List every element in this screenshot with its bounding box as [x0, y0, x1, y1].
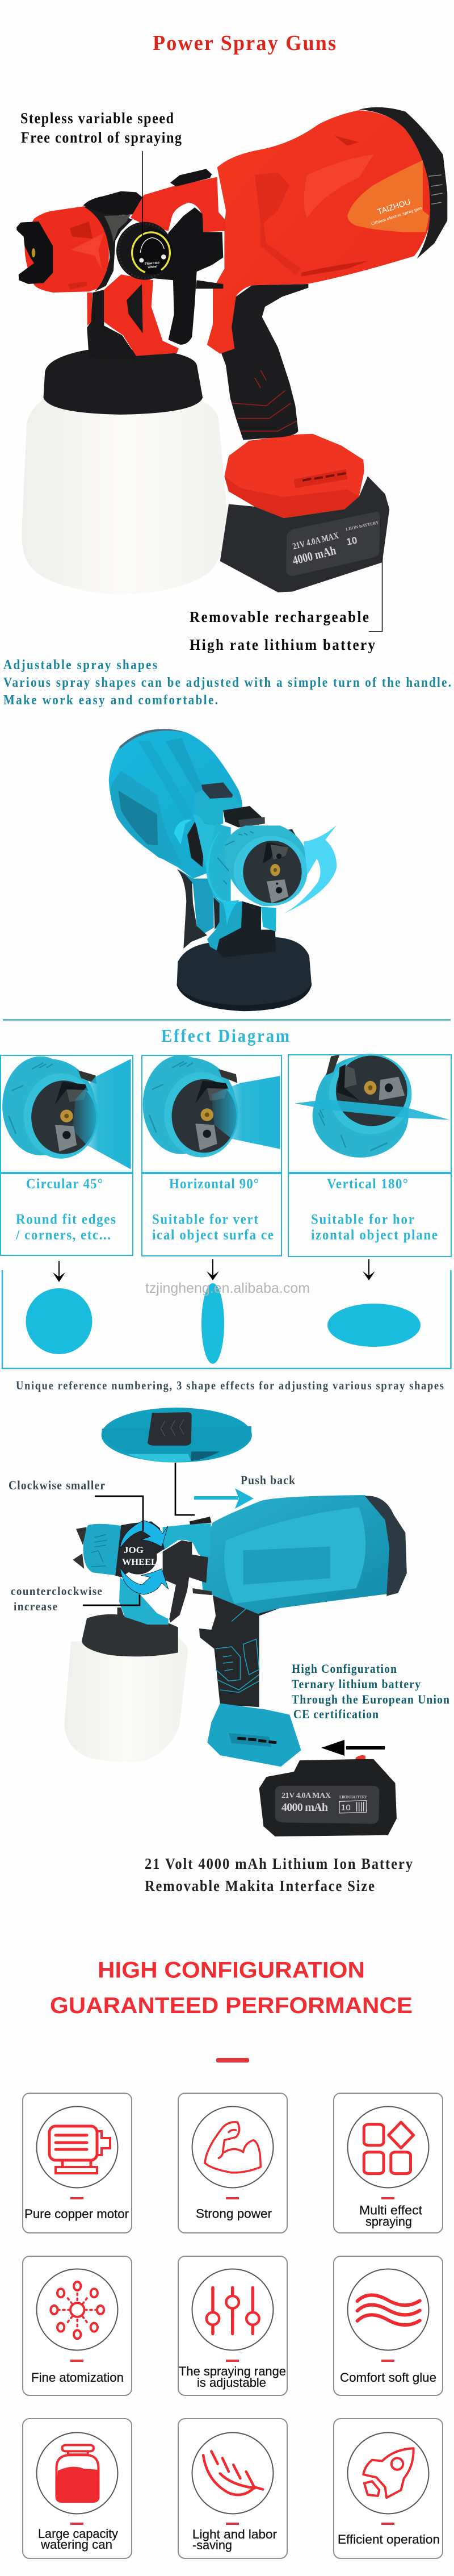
text block: adjustable spray shapes — [3, 657, 451, 707]
top tab — [83, 191, 146, 215]
callout: battery: Removable rechargeable — [190, 608, 369, 625]
switch — [201, 782, 233, 799]
nozzle tips — [76, 1527, 87, 1545]
callout: push back: Push back — [241, 1473, 295, 1487]
description: Suitable for hor — [311, 1212, 414, 1228]
text block: high configuration battery: Through the European Union — [292, 1693, 449, 1706]
arrow: horizontal pattern — [363, 1259, 375, 1280]
cup stem — [87, 290, 138, 360]
card: multi effect spraying: Multi effect — [359, 2203, 423, 2218]
battery pack — [220, 476, 389, 592]
callout: variable speed: Stepless variable speed — [20, 110, 174, 127]
heading: high configuration guaranteed performance: GUARANTEED PERFORMANCE — [50, 1993, 413, 2018]
card: light and labor saving: Light and labor — [192, 2527, 277, 2541]
battery label text — [291, 520, 380, 567]
callout: clockwise smaller: Clockwise smaller — [9, 1479, 105, 1492]
jog wheel caption: JOG — [124, 1546, 144, 1555]
black nozzle tip — [16, 222, 53, 284]
spray shape: circle — [26, 1288, 92, 1354]
description — [15, 1212, 116, 1243]
description: / corners, etc... — [15, 1227, 111, 1243]
battery label panel — [286, 512, 380, 576]
dial edge — [280, 829, 300, 842]
swoosh around nozzle — [206, 826, 239, 925]
callout: variable speed: Free control of spraying — [21, 129, 182, 146]
top clamp — [223, 806, 265, 828]
icon: waves — [358, 2295, 420, 2325]
rotation arrows — [120, 1521, 168, 1547]
nozzle with spray fan — [2, 1057, 131, 1169]
shape name: Horizontal 90° — [169, 1176, 259, 1192]
card: efficient operation — [334, 2419, 443, 2558]
card: fine atomization — [23, 2256, 132, 2395]
description: Round fit edges — [16, 1212, 116, 1228]
caption: Unique reference numbering, 3 shape effects for adjusting various spray shapes — [16, 1379, 444, 1392]
red nozzle — [24, 206, 109, 293]
card: comfort soft glue: Comfort soft glue — [340, 2370, 436, 2385]
icon: muscle arm — [205, 2122, 260, 2173]
text block: high configuration battery — [292, 1662, 449, 1721]
cup lid — [177, 937, 312, 1011]
panel: horizontal 90 — [142, 1055, 281, 1256]
callout: counterclockwise increase: increase — [14, 1600, 57, 1613]
main motor housing — [207, 110, 430, 354]
icon: jar — [56, 2445, 98, 2502]
heading: high configuration guaranteed performance — [50, 1957, 413, 2018]
swoosh: left — [174, 820, 192, 845]
text block: high configuration battery: Ternary lithium battery — [292, 1677, 421, 1691]
icon: rocket — [363, 2448, 414, 2498]
flow rate wheel: wheel — [147, 265, 158, 270]
battery pack: LIION BATTERY — [339, 1795, 367, 1800]
battery adapter foot — [207, 1704, 301, 1767]
neck behind nozzle — [206, 824, 231, 903]
front arm — [207, 896, 242, 950]
card: light and labor saving — [178, 2419, 287, 2558]
icon: feather — [203, 2451, 263, 2495]
heading accent dash — [216, 2058, 249, 2063]
red battery adapter foot — [224, 434, 364, 518]
pistol grip — [221, 284, 308, 440]
card: pure copper motor: Pure copper motor — [24, 2207, 129, 2221]
housing shading — [255, 173, 301, 275]
description — [152, 1212, 274, 1243]
black collar — [83, 206, 132, 291]
jog wheel caption: WHEEL — [122, 1558, 157, 1567]
paint cup — [22, 399, 229, 595]
callout: push back — [194, 1473, 295, 1509]
card: large capacity watering can — [23, 2419, 132, 2558]
section divider — [3, 1019, 451, 1020]
flow rate wheel: Flow rate — [145, 261, 160, 266]
card: spraying range adjustable: is adjustable — [197, 2375, 266, 2390]
description — [311, 1212, 438, 1243]
trigger assembly — [153, 207, 223, 345]
nozzle with spray fan — [295, 1054, 449, 1158]
panel: vertical 180 — [288, 1054, 451, 1256]
card: large capacity watering can: watering can — [40, 2537, 112, 2552]
card: multi effect spraying: spraying — [365, 2214, 412, 2229]
main housing — [200, 1495, 398, 1614]
icon: motor — [49, 2126, 110, 2173]
arrow: vertical pattern — [207, 1259, 219, 1280]
text block: high configuration battery: CE certification — [293, 1707, 379, 1721]
leader lines — [83, 1463, 195, 1605]
card: light and labor saving: -saving — [192, 2538, 232, 2552]
image box — [288, 1055, 451, 1172]
cup lid — [44, 350, 203, 415]
arrow: circular pattern — [53, 1261, 65, 1282]
icon: four shapes — [364, 2122, 414, 2174]
battery pack: 21V 4.0A MAX — [281, 1792, 331, 1800]
spray shape: vertical oval — [201, 1283, 224, 1364]
icon: atomized droplets — [51, 2282, 104, 2339]
black stem — [217, 901, 276, 958]
callout: counterclockwise increase — [11, 1585, 102, 1613]
battery pack: 4000 mAh — [281, 1801, 328, 1814]
rotation arrow — [284, 825, 337, 913]
card: efficient operation: Efficient operation — [338, 2532, 440, 2546]
text block: battery specification: Removable Makita Interface Size — [145, 1877, 375, 1894]
card: comfort soft glue — [334, 2256, 443, 2395]
red spray gun photo illustration — [16, 107, 447, 595]
battery label text: 21V 4.0A MAX — [292, 531, 340, 552]
arch and trigger — [187, 822, 204, 867]
front arm — [119, 1577, 169, 1625]
text block: high configuration battery: High Configuration — [292, 1662, 397, 1676]
card: large capacity watering can: Large capacity — [38, 2527, 119, 2541]
label box — [1, 1174, 133, 1255]
front arm — [104, 274, 179, 356]
text block: adjustable spray shapes: Adjustable spray shapes — [3, 657, 157, 672]
icon: sliders — [207, 2287, 259, 2333]
text block: adjustable spray shapes: Make work easy and comfortable. — [3, 692, 218, 707]
battery label text: 10 — [346, 535, 358, 548]
text block: battery specification: 21 Volt 4000 mAh Lithium Ion Battery — [145, 1855, 413, 1872]
jog wheel — [119, 1540, 157, 1575]
callout: counterclockwise increase: counterclockwise — [11, 1585, 102, 1598]
image box — [1, 1055, 133, 1172]
card: spraying range adjustable: The spraying range — [179, 2364, 286, 2378]
barrel — [163, 1523, 211, 1556]
description: izontal object plane — [311, 1227, 438, 1243]
jog wheel caption — [122, 1546, 157, 1567]
battery label text: LIION BATTERY — [345, 520, 380, 532]
handle grip — [199, 1596, 279, 1707]
blue spray gun side view — [64, 1495, 407, 1767]
card: strong power — [178, 2093, 287, 2233]
flow rate wheel — [116, 222, 173, 280]
heading: effect diagram: Effect Diagram — [161, 1026, 289, 1046]
spray pattern bracket — [2, 1270, 451, 1368]
image box — [142, 1055, 281, 1172]
description: ical object surfa ce — [152, 1227, 274, 1243]
blue spray gun front view — [109, 729, 337, 1011]
description: Suitable for vert — [152, 1212, 258, 1228]
badge brand text: TAIZHOU — [376, 197, 411, 216]
card: multi effect spraying — [334, 2093, 443, 2233]
detail oval: push switch — [102, 1408, 252, 1463]
barrel — [193, 790, 242, 828]
card: pure copper motor — [23, 2093, 132, 2233]
gun body — [109, 729, 242, 879]
battery pack: 10 — [341, 1803, 351, 1813]
card: spraying range adjustable — [178, 2256, 287, 2395]
heading: high configuration guaranteed performance: HIGH CONFIGURATION — [98, 1957, 365, 1982]
top barrel — [131, 177, 226, 232]
nozzle face — [243, 841, 302, 903]
label box — [142, 1174, 281, 1256]
trigger assembly — [163, 1540, 208, 1623]
label box — [288, 1174, 451, 1256]
battery pack — [259, 1755, 397, 1836]
card: strong power: Strong power — [196, 2206, 272, 2221]
text block: adjustable spray shapes: Various spray shapes can be adjusted with a simple turn of the handle. — [3, 675, 451, 690]
grip — [178, 869, 214, 933]
collar — [115, 1521, 165, 1577]
slide switch — [170, 169, 212, 186]
panel: circular 45 — [1, 1055, 133, 1255]
badge brand text: Lithium electric spray gun — [371, 205, 423, 227]
card: fine atomization: Fine atomization — [31, 2370, 124, 2385]
nozzle with spray fan — [143, 1055, 280, 1157]
rear cap — [365, 1496, 407, 1596]
nozzle — [83, 1524, 121, 1575]
shape name: Vertical 180° — [327, 1176, 408, 1192]
cup lid — [82, 1614, 178, 1656]
nozzle ring — [225, 825, 306, 906]
orange brand badge — [347, 160, 429, 232]
shape name: Circular 45° — [26, 1176, 103, 1192]
arrow: insert battery — [321, 1740, 385, 1756]
callout: battery — [190, 557, 382, 653]
rear end cap — [359, 107, 447, 258]
text block: battery specification — [145, 1855, 413, 1894]
callout: variable speed — [20, 110, 182, 236]
paint cup — [64, 1636, 188, 1762]
callout: battery: High rate lithium battery — [190, 636, 375, 653]
switch — [190, 1517, 212, 1525]
spray shape: horizontal oval — [327, 1304, 421, 1347]
title: Power Spray Guns — [153, 31, 336, 55]
watermark: tzjingheng.en.alibaba.com — [145, 1280, 310, 1296]
battery label text: 4000 mAh — [291, 543, 337, 567]
